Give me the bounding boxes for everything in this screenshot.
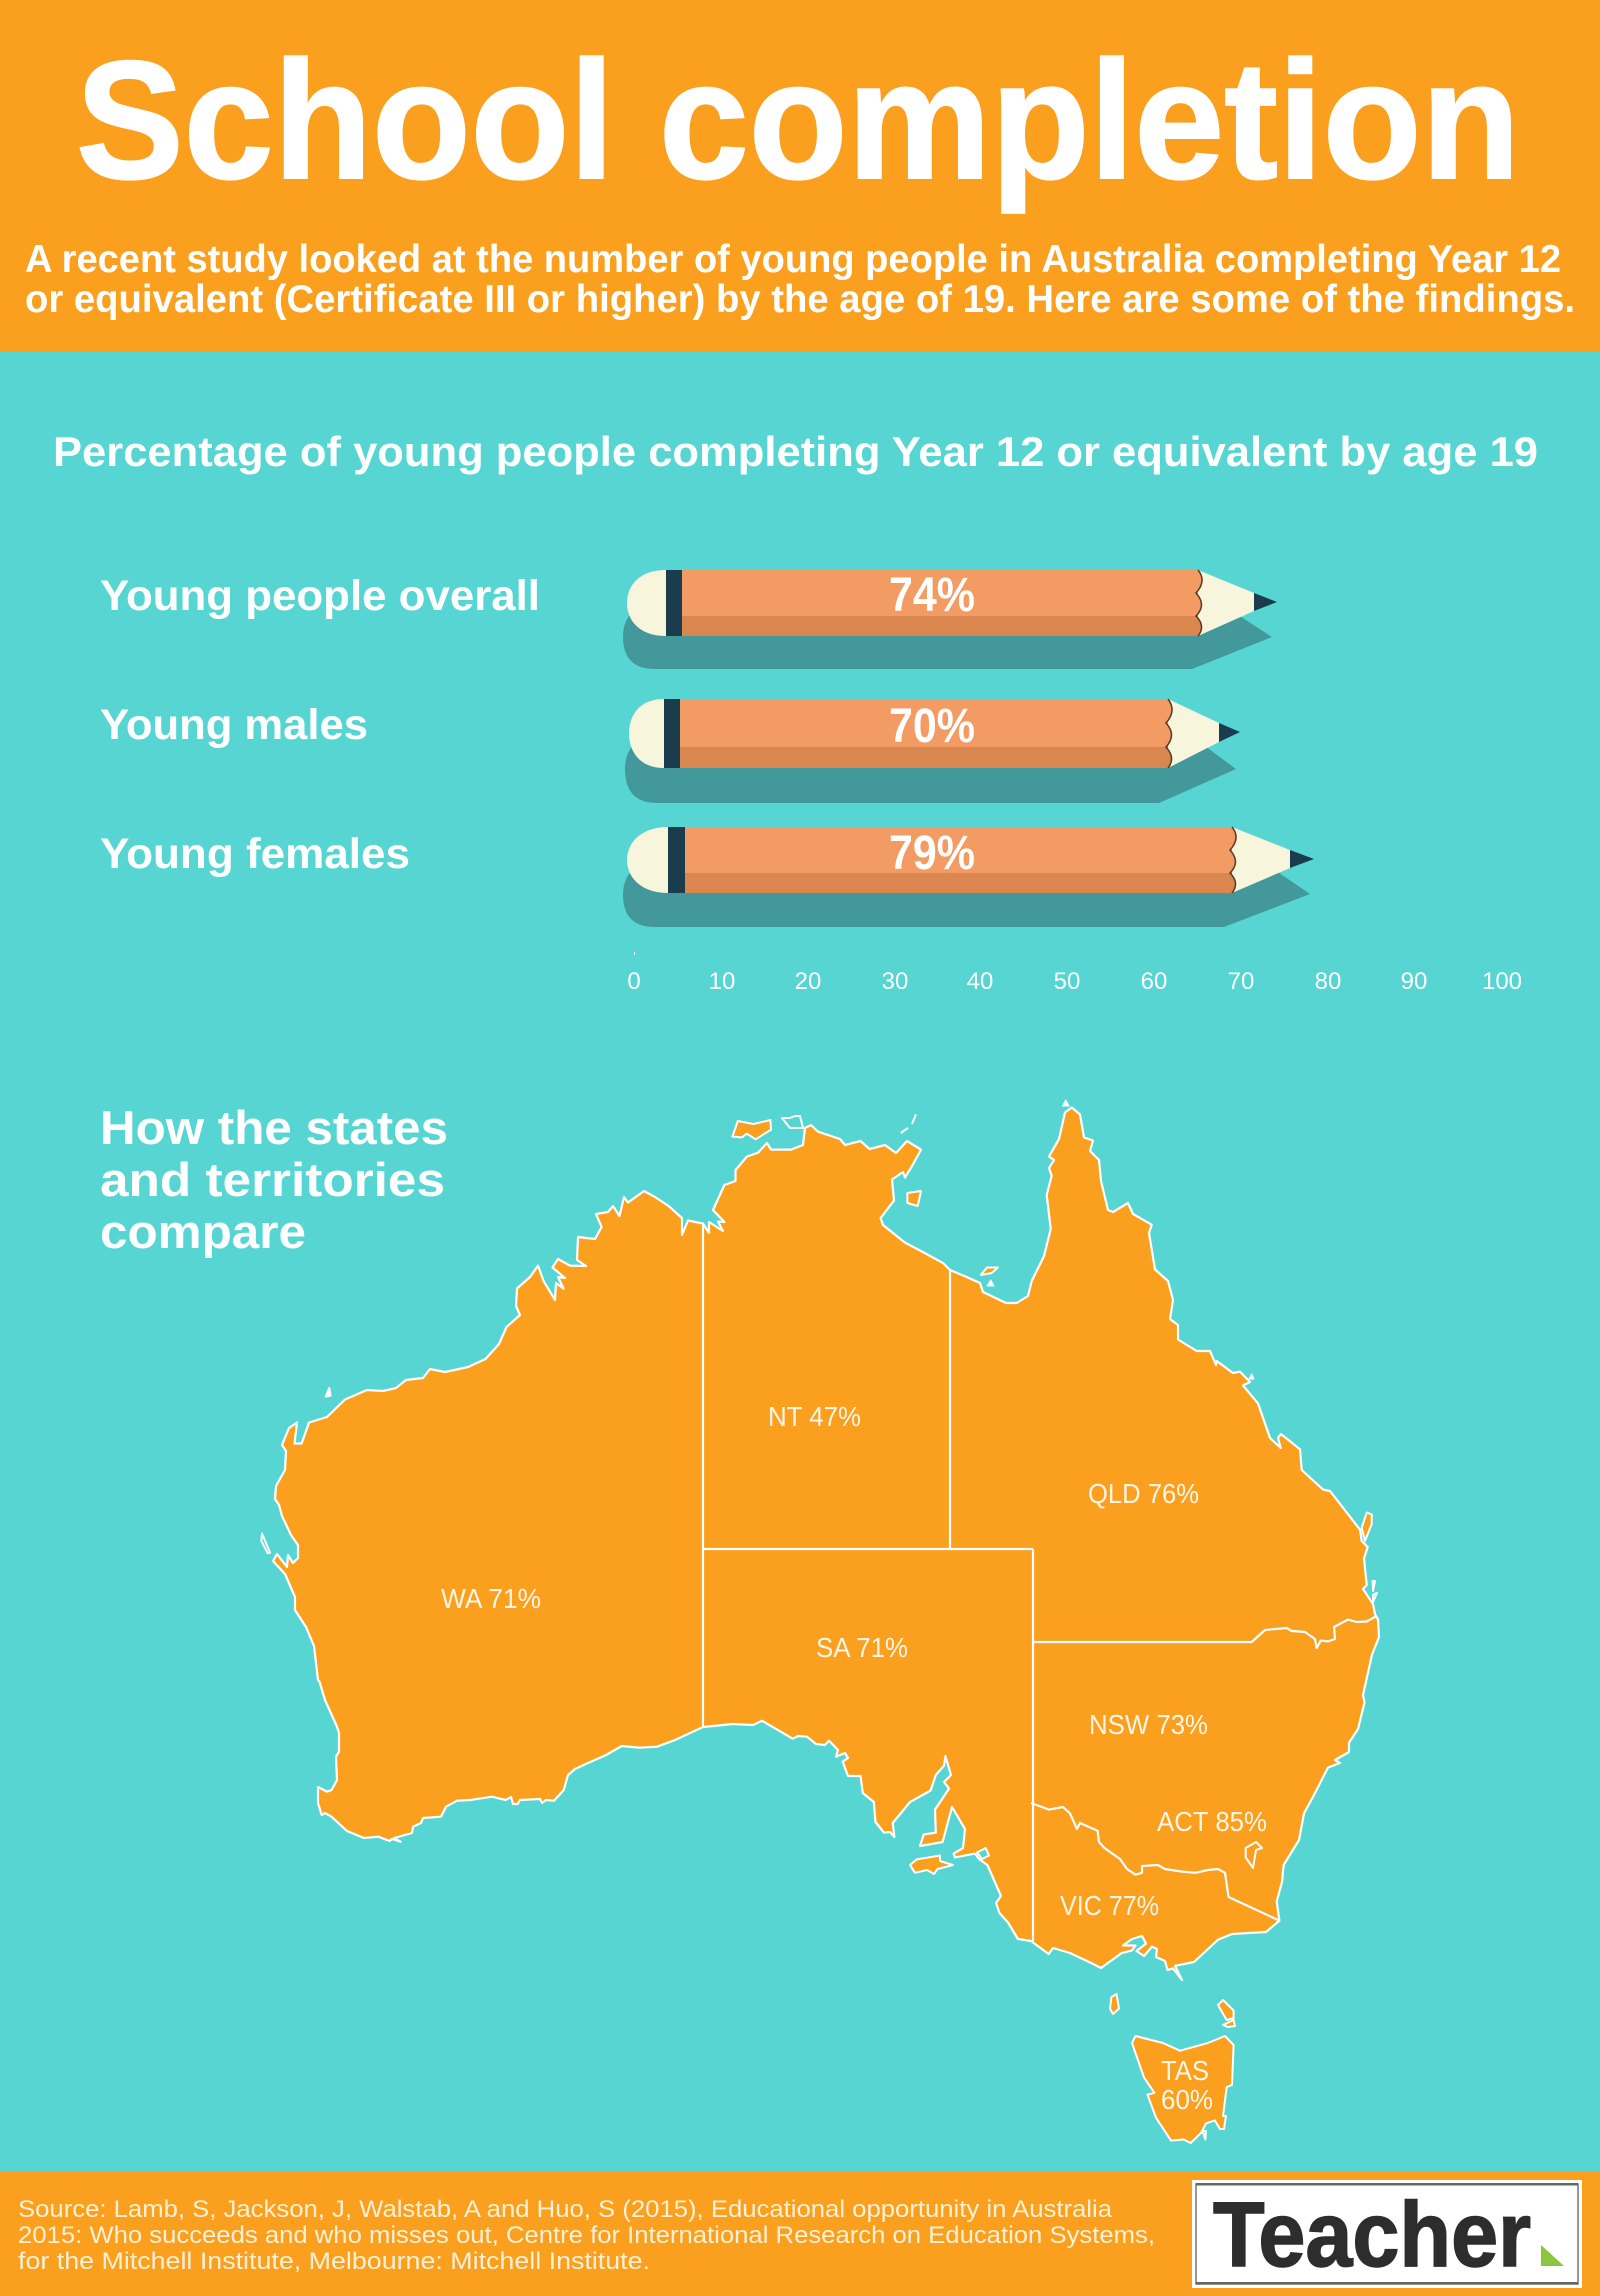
- source text: 2015: Who succeeds and who misses out, Centre for International Research on Education Systems,: [18, 2222, 1155, 2249]
- pencil: overall 74%: 74%: [889, 569, 975, 622]
- axis: 0 to 100: 50: [1054, 968, 1080, 995]
- axis: 0 to 100: 10: [709, 968, 735, 995]
- panel: pencil bar chart: [100, 569, 1522, 995]
- axis: 0 to 100: 70: [1228, 968, 1254, 995]
- state labels: 60%: [1161, 2084, 1213, 2115]
- axis: 0 to 100: 20: [795, 968, 821, 995]
- source text: Source: Lamb, S, Jackson, J, Walstab, A and Huo, S (2015), Educational opportunity in Australia: [18, 2196, 1113, 2223]
- source text: for the Mitchell Institute, Melbourne: Mitchell Institute.: [18, 2248, 650, 2275]
- intro text: A recent study looked at the number of young people in Australia completing Year 12: [25, 238, 1561, 281]
- heading: states and territories: compare: [100, 1205, 306, 1258]
- state labels: NSW 73%: [1089, 1709, 1208, 1740]
- state labels: NT 47%: [768, 1401, 861, 1432]
- islands: [261, 1100, 1377, 2143]
- panel: header: [0, 0, 1600, 352]
- panel: footer: [0, 2172, 1600, 2296]
- state labels: WA 71%: [441, 1583, 541, 1614]
- axis: 0 to 100: 0: [627, 968, 641, 995]
- state labels: TAS: [1161, 2055, 1209, 2086]
- row label: young people overall: Young people overall: [100, 572, 540, 620]
- pencil: females 79%: [623, 827, 1314, 927]
- heading: states and territories: [100, 1101, 448, 1258]
- mainland coast: [273, 1108, 1379, 1980]
- state labels: SA 71%: [816, 1632, 908, 1663]
- row label: young females: Young females: [100, 830, 410, 878]
- state labels: QLD 76%: [1088, 1478, 1199, 1509]
- state labels: ACT 85%: [1157, 1806, 1267, 1837]
- axis: 0 to 100: 90: [1401, 968, 1427, 995]
- pencil: overall 74%: [623, 569, 1277, 669]
- title: School completion: [76, 26, 1520, 214]
- heading: states and territories: and territories: [100, 1153, 445, 1206]
- heading: chart: Percentage of young people completing Year 12 or equivalent by age 19: [53, 428, 1538, 475]
- axis: 0 to 100: 100: [1482, 968, 1522, 995]
- map of Australia: [261, 1100, 1379, 2143]
- state labels: [441, 1401, 1267, 2115]
- axis: 0 to 100: [627, 952, 1522, 995]
- logo: Teacher: Teacher: [1213, 2184, 1531, 2286]
- intro text: [25, 238, 1575, 321]
- state borders: [703, 1224, 1377, 1941]
- axis: 0 to 100: 60: [1141, 968, 1167, 995]
- axis: 0 to 100: 30: [882, 968, 908, 995]
- axis: 0 to 100: 80: [1315, 968, 1341, 995]
- pencil: females 79%: 79%: [889, 827, 975, 880]
- source text: [18, 2196, 1155, 2275]
- pencil: males 70%: [625, 699, 1240, 803]
- intro text: or equivalent (Certificate III or higher) by the age of 19. Here are some of the findings.: [25, 278, 1575, 321]
- row label: young males: Young males: [100, 701, 368, 749]
- pencil: males 70%: 70%: [889, 700, 975, 753]
- heading: states and territories: How the states: [100, 1101, 448, 1154]
- state labels: VIC 77%: [1060, 1890, 1159, 1921]
- axis: 0 to 100: 40: [967, 968, 993, 995]
